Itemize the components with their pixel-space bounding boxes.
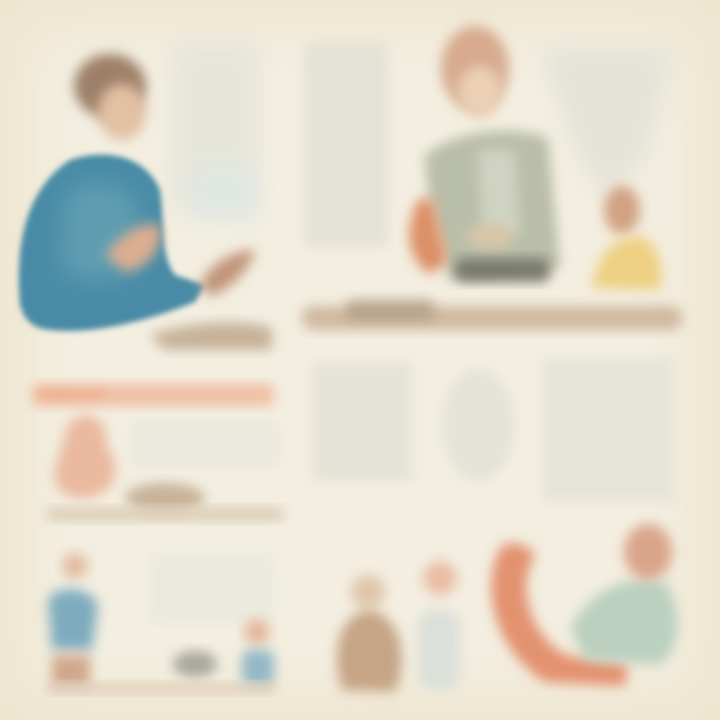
face: [98, 84, 146, 140]
head: [441, 26, 509, 110]
orange arm: [409, 198, 448, 274]
blue sweater: [19, 155, 205, 331]
panel: bottom centre figures: [337, 561, 460, 692]
table under blue figure: [150, 322, 272, 350]
hands: [105, 224, 161, 272]
pink figure: [54, 415, 116, 498]
panel: text blocks middle right: [312, 358, 674, 502]
figure: central person with green vest: [409, 26, 560, 282]
torso: [425, 131, 560, 280]
panel: middle left illustration: [48, 415, 283, 521]
panel: bottom right figures: [491, 524, 678, 686]
head: [624, 524, 672, 580]
figure: child in yellow: [592, 186, 661, 290]
hair: [74, 54, 146, 118]
figure: person in blue sweater: [19, 54, 255, 331]
small blue figure: [62, 553, 88, 579]
panel: text column top centre: [304, 42, 388, 247]
orange arch: [491, 543, 628, 686]
small dark object: [173, 651, 217, 677]
heading: orange title band: [32, 384, 274, 406]
ground: [48, 683, 273, 694]
dark waistband: [455, 258, 550, 282]
panel: text column top left: [172, 42, 260, 220]
table: top right panel: [302, 300, 682, 330]
panel: text column top right: [540, 48, 675, 200]
hands: [466, 224, 514, 248]
ground band: [48, 507, 283, 521]
green figure: [570, 579, 678, 665]
panel: bottom left scene: [48, 553, 275, 694]
second small figure: [244, 619, 270, 645]
brown pile: [125, 483, 205, 513]
